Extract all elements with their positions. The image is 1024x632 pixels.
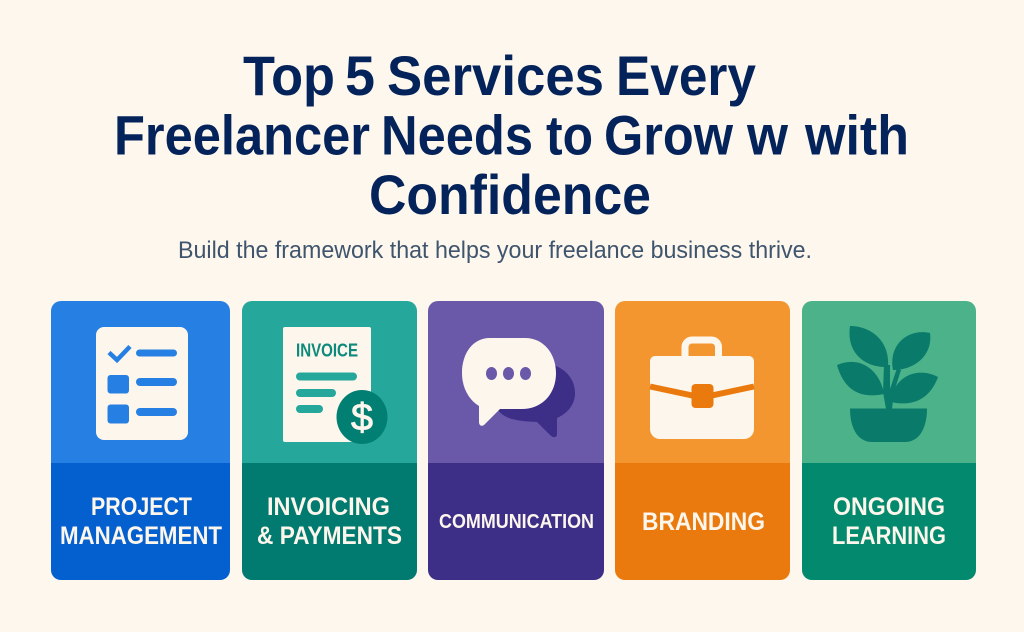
title: w bbox=[746, 104, 788, 166]
subtitle: Build the framework that helps your freelance business thrive. bbox=[178, 237, 812, 264]
panel: branding bbox=[615, 301, 790, 580]
title: Needs bbox=[381, 104, 533, 166]
title bbox=[114, 44, 909, 226]
label: ongoing learning: ONGOING bbox=[833, 493, 945, 521]
label: project management bbox=[60, 493, 222, 550]
label: ongoing learning: LEARNING bbox=[832, 522, 946, 550]
card background bbox=[242, 301, 417, 580]
label: project management: PROJECT bbox=[91, 493, 192, 521]
icon: invoice bbox=[283, 327, 388, 444]
card background bbox=[428, 301, 604, 580]
title: 5 bbox=[345, 44, 375, 107]
icon: potted plant bbox=[837, 326, 938, 442]
icon: speech bubbles bbox=[462, 338, 575, 437]
label: ongoing learning bbox=[832, 493, 946, 550]
panel: invoicing and payments bbox=[242, 301, 417, 580]
title: Confidence bbox=[369, 163, 651, 226]
icon: briefcase bbox=[650, 340, 754, 439]
title: Every bbox=[616, 44, 756, 107]
panel: ongoing learning bbox=[802, 301, 976, 580]
panel: project management bbox=[51, 301, 230, 580]
icon: invoice: $ bbox=[351, 397, 373, 439]
panel: communication bbox=[428, 301, 604, 580]
title: Freelancer bbox=[114, 104, 370, 166]
label: invoicing and payments: INVOICING bbox=[267, 493, 390, 521]
label: invoicing and payments: & PAYMENTS bbox=[257, 522, 402, 550]
icon: invoice: INVOICE bbox=[296, 340, 358, 360]
icon: checklist bbox=[96, 327, 188, 440]
title: Grow bbox=[604, 104, 733, 166]
label: communication: COMMUNICATION bbox=[439, 510, 594, 533]
title: to bbox=[546, 104, 593, 166]
card background bbox=[51, 301, 230, 580]
title: with bbox=[804, 104, 909, 166]
title: Services bbox=[387, 44, 604, 107]
card background bbox=[802, 301, 976, 580]
label: project management: MANAGEMENT bbox=[60, 522, 222, 550]
label: branding: BRANDING bbox=[642, 508, 765, 536]
label: invoicing and payments bbox=[257, 493, 402, 550]
title: Top bbox=[243, 44, 335, 107]
card background bbox=[615, 301, 790, 580]
